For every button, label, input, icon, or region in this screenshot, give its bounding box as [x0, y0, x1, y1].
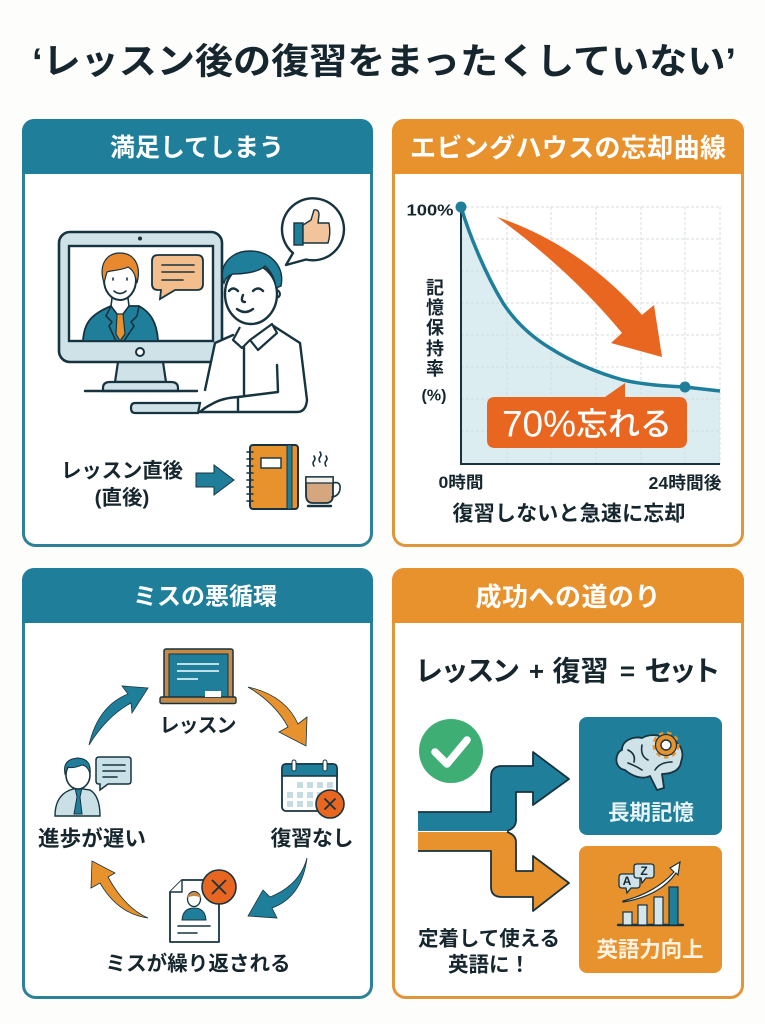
y axis labels: 記 [426, 278, 444, 298]
icon: bar chart with speech [618, 862, 683, 925]
icon: green check [419, 719, 483, 783]
icon: bar chart with speech: Z [640, 864, 648, 878]
icon: bar chart with speech: A [623, 874, 632, 888]
x axis labels: 0時間 [438, 473, 484, 492]
panel header: forgetting curve [392, 119, 744, 174]
icon: notebook [247, 445, 298, 509]
arrow: orange branch [418, 832, 569, 911]
callout: 70 percent forgotten: 70%忘れる [502, 404, 672, 444]
chart caption: 復習しないと急速に忘却 [452, 502, 686, 526]
label: no review: 復習なし [270, 828, 354, 850]
card: long term memory: 長期記憶 [608, 801, 694, 825]
icon: person with speech bubble [55, 757, 131, 816]
panel header: satisfied: 満足してしまう [110, 134, 284, 162]
heading: lesson plus review is a set [415, 656, 720, 686]
y axis labels [406, 202, 454, 404]
text: right after lesson [61, 460, 184, 510]
arrow: lesson to no review [248, 687, 307, 746]
y axis labels: 率 [426, 359, 444, 379]
icon: monitor [59, 232, 222, 391]
icon: brain with gear [616, 734, 682, 790]
y axis labels: 保 [426, 318, 444, 338]
icon: smiling learner [200, 251, 307, 412]
arrow: slow progress to lesson [89, 686, 148, 745]
label: mistakes repeat: ミスが繰り返される [106, 952, 290, 976]
heading: lesson plus review is a set: = [620, 656, 635, 686]
card: English ability [579, 846, 722, 973]
icon: teacher on screen [83, 253, 158, 341]
panel header: road to success: 成功への道のり [476, 582, 660, 612]
x axis labels [438, 473, 722, 493]
panel header: vicious cycle: ミスの悪循環 [133, 584, 277, 610]
panel header: forgetting curve: エビングハウスの忘却曲線 [410, 133, 726, 163]
text: usable English [418, 928, 560, 976]
text: right after lesson: (直後) [95, 486, 149, 510]
icon: thumbs up bubble [282, 198, 344, 265]
panel: forgetting curve [392, 119, 744, 546]
arrow: to notebook [196, 465, 234, 495]
panel: vicious cycle [22, 568, 373, 998]
label: slow progress: 進歩が遅い [38, 826, 146, 851]
panel: road to success [392, 568, 744, 998]
text: usable English: 定着して使える [418, 928, 560, 950]
panel header: satisfied [22, 119, 373, 174]
chart: forgetting curve [456, 202, 720, 464]
arrow: steep decline [497, 217, 662, 357]
icon: calendar [282, 760, 344, 818]
text: right after lesson: レッスン直後 [61, 460, 184, 482]
heading: lesson plus review is a set: 復習 [552, 656, 608, 686]
icon: document with error [170, 870, 236, 942]
arrow: no review to repeated mistakes [248, 858, 307, 918]
arrow: mistakes to slow progress [91, 861, 148, 918]
arrow: teal branch [418, 752, 569, 831]
heading: lesson plus review is a set: + [529, 656, 544, 686]
icon: teacher speech bubble [152, 255, 203, 299]
y axis labels: 持 [426, 339, 444, 359]
y axis labels: 100% [406, 202, 454, 220]
heading: lesson plus review is a set: レッスン [415, 656, 520, 686]
panel header: road to success [392, 568, 744, 623]
text: usable English: 英語に！ [448, 954, 530, 976]
card: long term memory [579, 717, 722, 835]
label: lesson: レッスン [160, 715, 236, 737]
card: English ability: 英語力向上 [596, 938, 704, 962]
x axis labels: 24時間後 [648, 473, 722, 493]
icon: keyboard [131, 403, 200, 413]
heading: lesson plus review is a set: セット [644, 656, 720, 686]
title: ‘レッスン後の復習をまったくしていない’ [32, 40, 736, 82]
y axis labels: (%) [422, 388, 446, 404]
icon: coffee cup [306, 452, 340, 506]
panel header: vicious cycle [22, 568, 373, 623]
chart fill [461, 207, 720, 464]
callout: 70 percent forgotten [487, 383, 687, 448]
panel: satisfied [22, 119, 373, 546]
icon: blackboard [160, 649, 236, 704]
y axis labels: 憶 [426, 298, 444, 318]
